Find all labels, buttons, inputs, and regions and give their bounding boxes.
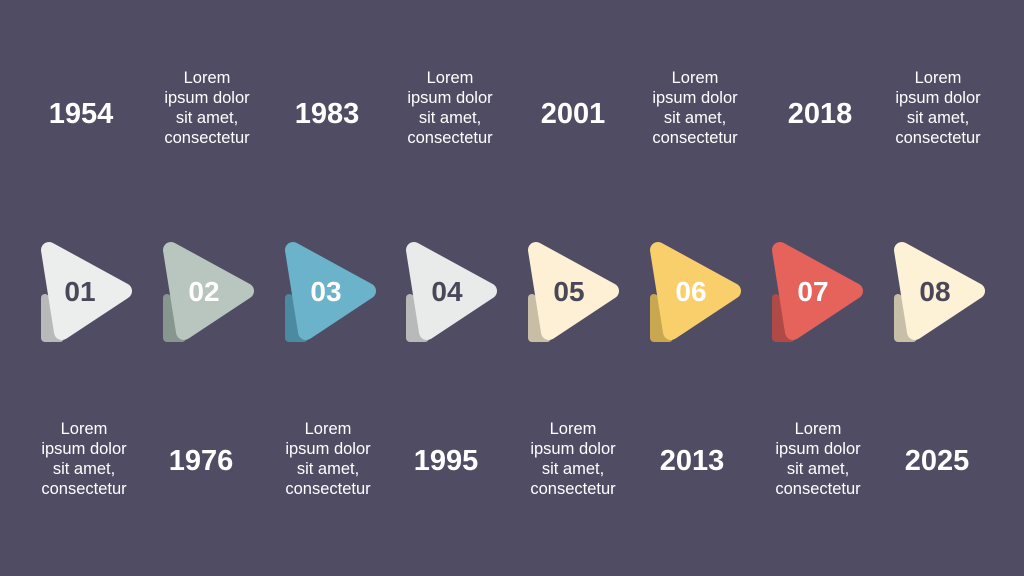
text block bottom 3: Lorem bbox=[550, 420, 596, 438]
text block top 2: sit amet, bbox=[419, 109, 481, 127]
text block bottom 2: consectetur bbox=[285, 480, 371, 498]
text block bottom 4: sit amet, bbox=[787, 460, 849, 478]
arrow 08 bbox=[898, 250, 977, 338]
year 1995: 1995 bbox=[414, 445, 478, 477]
text block top 1: consectetur bbox=[164, 129, 250, 147]
arrow 06 bbox=[654, 250, 733, 338]
text block bottom 1: consectetur bbox=[41, 480, 127, 498]
text block top 4 bbox=[895, 69, 981, 147]
arrow 05: 05 bbox=[553, 276, 585, 307]
text block bottom 1: Lorem bbox=[61, 420, 107, 438]
arrow 05 bbox=[532, 250, 611, 338]
text block bottom 3: consectetur bbox=[530, 480, 616, 498]
text block bottom 2: ipsum dolor bbox=[285, 440, 371, 458]
text block top 4: sit amet, bbox=[907, 109, 969, 127]
text block top 1: ipsum dolor bbox=[164, 89, 250, 107]
arrow 02 bbox=[167, 250, 246, 338]
text block bottom 2: Lorem bbox=[305, 420, 351, 438]
arrow 03: 03 bbox=[310, 276, 342, 307]
text block top 1 bbox=[164, 69, 250, 147]
arrow 01: 01 bbox=[64, 276, 96, 307]
text block top 2: consectetur bbox=[407, 129, 493, 147]
year 2018: 2018 bbox=[788, 98, 852, 130]
text block top 3: ipsum dolor bbox=[652, 89, 738, 107]
text block bottom 4: ipsum dolor bbox=[775, 440, 861, 458]
text block bottom 4 bbox=[775, 420, 861, 498]
text block top 3 bbox=[652, 69, 738, 147]
year 1976: 1976 bbox=[169, 445, 233, 477]
arrow 06: 06 bbox=[675, 276, 707, 307]
text block bottom 3: sit amet, bbox=[542, 460, 604, 478]
arrow 03 bbox=[289, 250, 368, 338]
year 2025: 2025 bbox=[905, 445, 969, 477]
text block top 4: Lorem bbox=[915, 69, 961, 87]
text block bottom 2 bbox=[285, 420, 371, 498]
text block top 1: Lorem bbox=[184, 69, 230, 87]
arrow 04: 04 bbox=[431, 276, 463, 307]
year 1983: 1983 bbox=[295, 98, 359, 130]
text block bottom 1: ipsum dolor bbox=[41, 440, 127, 458]
text block top 3: Lorem bbox=[672, 69, 718, 87]
text block bottom 1: sit amet, bbox=[53, 460, 115, 478]
arrow 04 bbox=[410, 250, 489, 338]
text block top 2: ipsum dolor bbox=[407, 89, 493, 107]
text block top 1: sit amet, bbox=[176, 109, 238, 127]
text block bottom 2: sit amet, bbox=[297, 460, 359, 478]
year 2001: 2001 bbox=[541, 98, 605, 130]
text block bottom 4: consectetur bbox=[775, 480, 861, 498]
text block top 4: ipsum dolor bbox=[895, 89, 981, 107]
text block bottom 3 bbox=[530, 420, 616, 498]
arrow 01 bbox=[45, 250, 124, 338]
arrow 07: 07 bbox=[797, 276, 829, 307]
text block top 4: consectetur bbox=[895, 129, 981, 147]
text block bottom 1 bbox=[41, 420, 127, 498]
arrow 08: 08 bbox=[919, 276, 951, 307]
text block top 3: consectetur bbox=[652, 129, 738, 147]
arrow 02: 02 bbox=[188, 276, 220, 307]
text block top 2 bbox=[407, 69, 493, 147]
year 2013: 2013 bbox=[660, 445, 724, 477]
text block bottom 3: ipsum dolor bbox=[530, 440, 616, 458]
arrow 07 bbox=[776, 250, 855, 338]
text block top 2: Lorem bbox=[427, 69, 473, 87]
text block bottom 4: Lorem bbox=[795, 420, 841, 438]
year 1954: 1954 bbox=[49, 98, 113, 130]
text block top 3: sit amet, bbox=[664, 109, 726, 127]
